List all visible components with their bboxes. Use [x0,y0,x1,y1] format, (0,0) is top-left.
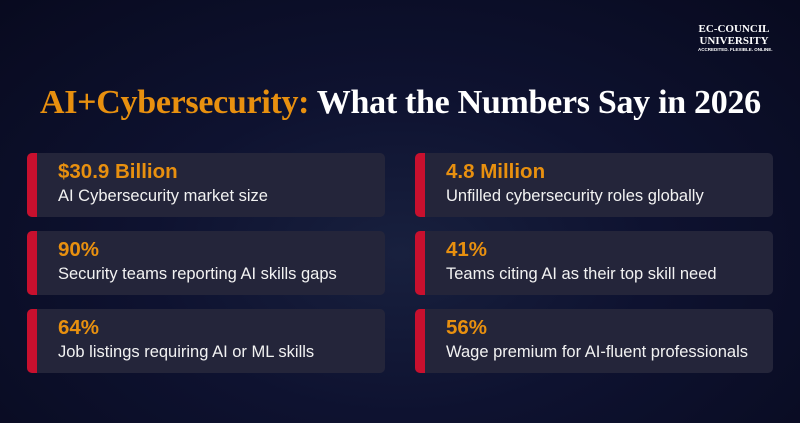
card: unfilled roles [415,153,773,217]
logo: UNIVERSITY [699,35,769,47]
card: top skill need: Teams citing AI as their top skill need [446,265,717,283]
card: job listings [27,309,385,373]
card: job listings: Job listings requiring AI or ML skills [58,343,314,361]
card: wage premium: Wage premium for AI-fluent professionals [446,343,748,361]
card: job listings: 64% [58,316,99,339]
card: skills gaps: 90% [58,238,99,261]
card: wage premium: 56% [446,316,487,339]
card: top skill need: 41% [446,238,487,261]
card: skills gaps: Security teams reporting AI skills gaps [58,265,337,283]
logo: EC-COUNCIL [699,23,769,35]
title: AI+Cybersecurity: What the Numbers Say in 2026 [40,84,761,121]
logo: ACCREDITED. FLEXIBLE. ONLINE. [698,47,773,52]
card: top skill need [415,231,773,295]
card: market size: $30.9 Billion [58,160,178,183]
card: unfilled roles: Unfilled cybersecurity roles globally [446,187,704,205]
card: wage premium [415,309,773,373]
card: market size: AI Cybersecurity market size [58,187,268,205]
card: skills gaps [27,231,385,295]
card: unfilled roles: 4.8 Million [446,160,545,183]
logo [698,23,773,52]
card: market size [27,153,385,217]
